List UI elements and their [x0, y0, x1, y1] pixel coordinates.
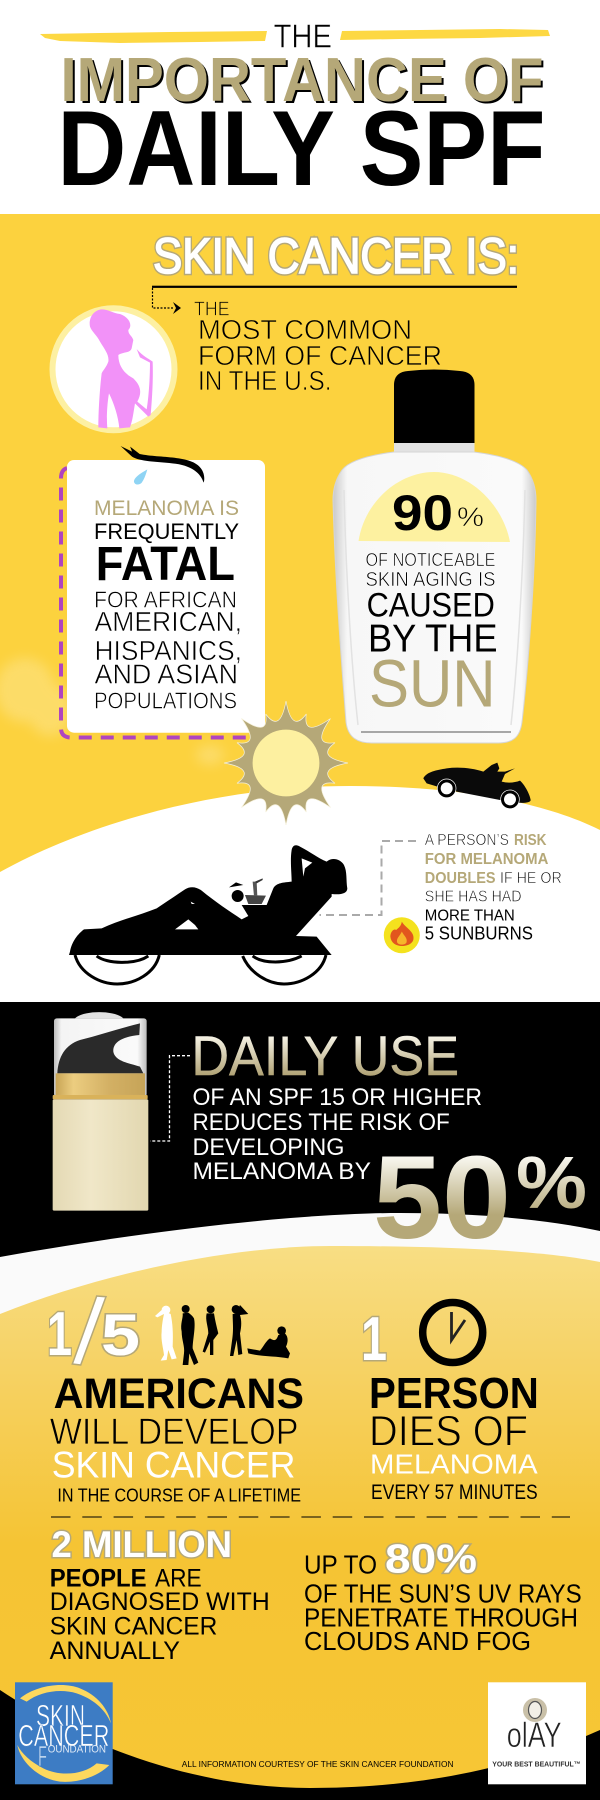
background cloud haze: [0, 658, 224, 765]
stat: 1 with clock: 1: [361, 1305, 387, 1374]
icon: woman on sun lounger: [69, 845, 347, 984]
text block: person dies of melanoma: [369, 1369, 539, 1504]
stat: 1/5: 1: [47, 1300, 72, 1369]
logo: olay: [488, 1682, 586, 1784]
dome highlight: [358, 472, 510, 542]
brush stroke right: [340, 29, 550, 40]
text block: 80%: CLOUDS AND FOG: [304, 1626, 531, 1656]
stat: 50%: [373, 1132, 587, 1264]
text: aging caused by the sun: SUN: [369, 647, 496, 722]
text: melanoma is frequently fatal: [94, 497, 242, 713]
text: aging caused by the sun: [366, 550, 498, 722]
stat: 50%: 50: [373, 1132, 511, 1264]
footer credit: ALL INFORMATION COURTESY OF THE SKIN CANCER FOUNDATION: [182, 1759, 454, 1769]
title: THE: THE: [274, 18, 332, 55]
text: melanoma is frequently fatal: AMERICAN,: [94, 606, 242, 637]
bottle cap: [394, 370, 474, 443]
text: melanoma is frequently fatal: AND ASIAN: [94, 658, 238, 689]
logo: skin cancer foundation: SKIN: [36, 1698, 85, 1733]
text: melanoma is frequently fatal: MELANOMA IS: [94, 497, 239, 520]
stat: 1 with clock: [361, 1302, 483, 1374]
yellow stats panel: [0, 1246, 600, 1788]
heading: skin cancer is: SKIN CANCER IS:: [153, 228, 519, 284]
panel: black daily use band: [0, 1002, 600, 1800]
text: melanoma is frequently fatal: FOR AFRICAN: [94, 586, 237, 612]
text block: spf reduces risk: REDUCES THE RISK OF: [192, 1109, 450, 1136]
text block: risk for melanoma: A PERSON’S: [425, 832, 509, 849]
title: IMPORTANCE OF: IMPORTANCE OF: [62, 48, 546, 117]
icon: pump bottle: [53, 1012, 148, 1211]
icon: clock: [423, 1302, 483, 1362]
logo: skin cancer foundation: F: [38, 1741, 47, 1773]
icon: drink and cocktail tray: [229, 878, 266, 904]
text block: spf reduces risk: MELANOMA BY: [192, 1158, 371, 1185]
icon: eyelash and tear: [121, 446, 204, 485]
text block: most common form: FORM OF CANCER: [198, 340, 442, 371]
text: aging caused by the sun: SKIN AGING IS: [366, 569, 496, 591]
text block: risk for melanoma: MORE THAN: [425, 907, 515, 924]
text block: americans will develop: WILL DEVELOP: [50, 1411, 299, 1452]
text block: 80%: OF THE SUN’S UV RAYS: [304, 1579, 582, 1609]
icon: flame badge: [384, 917, 420, 953]
text block: most common form: THE: [194, 299, 230, 321]
text: melanoma is frequently fatal: FATAL: [96, 537, 235, 591]
text block: most common form: [194, 299, 442, 396]
logo: olay: olAY: [507, 1716, 562, 1755]
text block: risk for melanoma: 5 SUNBURNS: [425, 923, 533, 943]
panel: melanoma card: [61, 446, 265, 738]
bottle neck: [394, 443, 474, 453]
icon: five silhouettes: [155, 1305, 290, 1365]
text block: americans will develop: AMERICANS: [54, 1370, 304, 1418]
heading: daily use: DAILY USE: [191, 1025, 459, 1087]
stat: 50%: %: [516, 1141, 587, 1224]
stat: 1/5: 5: [101, 1303, 140, 1368]
text: aging caused by the sun: OF NOTICEABLE: [366, 550, 496, 570]
text block: 2 million: DIAGNOSED WITH: [50, 1588, 270, 1616]
bottle body: [333, 452, 536, 743]
text block: 2 million: ARE: [155, 1564, 202, 1592]
icon: convertible car: [423, 763, 531, 809]
text block: 80%: [304, 1536, 582, 1656]
dashed purple border: [61, 468, 254, 738]
text block: person dies of melanoma: DIES OF: [369, 1407, 528, 1455]
text block: 80%: UP TO: [304, 1550, 377, 1580]
text block: risk for melanoma: [425, 832, 562, 943]
title: IMPORTANCE OF: IMPORTANCE OF: [60, 46, 544, 115]
text block: risk for melanoma: FOR MELANOMA: [425, 851, 549, 868]
text block: 2 million: PEOPLE: [50, 1564, 147, 1592]
text block: 2 million: SKIN CANCER: [50, 1613, 217, 1641]
white hill: [0, 786, 600, 1002]
logo: skin cancer foundation: [15, 1682, 113, 1784]
panel: skin cancer facts yellow background: [0, 214, 600, 914]
brush stroke left: [40, 31, 267, 43]
text block: 2 million: 2 MILLION: [52, 1524, 232, 1565]
dashed connector: lounger to risk text: [320, 841, 416, 915]
text block: risk for melanoma: DOUBLES: [425, 870, 496, 887]
text block: 80%: 80%: [385, 1536, 477, 1582]
text block: 2 million: [50, 1524, 270, 1665]
panel: lotion bottle 90%: [333, 370, 536, 743]
stat: 90%: [392, 485, 484, 541]
text block: americans will develop: SKIN CANCER: [52, 1444, 295, 1486]
text: melanoma is frequently fatal: FREQUENTLY: [94, 519, 239, 544]
logo: skin cancer foundation: CANCER: [18, 1719, 109, 1753]
text: melanoma is frequently fatal: HISPANICS,: [94, 635, 242, 666]
text block: risk for melanoma: IF HE OR: [500, 870, 562, 887]
stat: 1/5: [47, 1296, 140, 1369]
text block: spf reduces risk: DEVELOPING: [192, 1134, 344, 1161]
text block: person dies of melanoma: PERSON: [369, 1369, 539, 1418]
text block: spf reduces risk: OF AN SPF 15 OR HIGHER: [192, 1084, 482, 1111]
text block: americans will develop: IN THE COURSE OF A LIFETIME: [57, 1486, 301, 1506]
header: title: [40, 18, 550, 208]
title: DAILY SPF: DAILY SPF: [57, 89, 545, 208]
text block: spf reduces risk: [192, 1084, 482, 1185]
text block: person dies of melanoma: EVERY 57 MINUTES: [371, 1481, 538, 1504]
text block: 2 million: ANNUALLY: [50, 1637, 180, 1665]
text block: most common form: MOST COMMON: [198, 314, 412, 345]
text block: person dies of melanoma: MELANOMA: [370, 1449, 538, 1480]
text: melanoma is frequently fatal: POPULATIONS: [94, 687, 237, 713]
text: aging caused by the sun: CAUSED: [367, 587, 495, 625]
white curve: [0, 1213, 600, 1400]
logo: skin cancer foundation: OUNDATION: [48, 1744, 106, 1756]
arrow: connector to common form text: [152, 288, 181, 314]
icon: sun: [224, 701, 348, 825]
dashed connector: bottle to daily use: [150, 1056, 190, 1141]
stat: 90%: 90: [392, 485, 453, 541]
text block: risk for melanoma: RISK: [514, 832, 547, 849]
heading: skin cancer is: SKIN CANCER IS:: [153, 228, 519, 284]
text block: americans will develop: [50, 1370, 304, 1506]
logo: olay: YOUR BEST BEAUTIFUL™: [492, 1760, 581, 1769]
text block: risk for melanoma: SHE HAS HAD: [425, 889, 522, 906]
text block: 80%: PENETRATE THROUGH: [304, 1602, 578, 1632]
text block: most common form: IN THE U.S.: [198, 365, 332, 396]
stat: 90%: %: [457, 502, 484, 532]
text: aging caused by the sun: BY THE: [368, 618, 498, 661]
icon: woman in circle: [52, 308, 174, 430]
